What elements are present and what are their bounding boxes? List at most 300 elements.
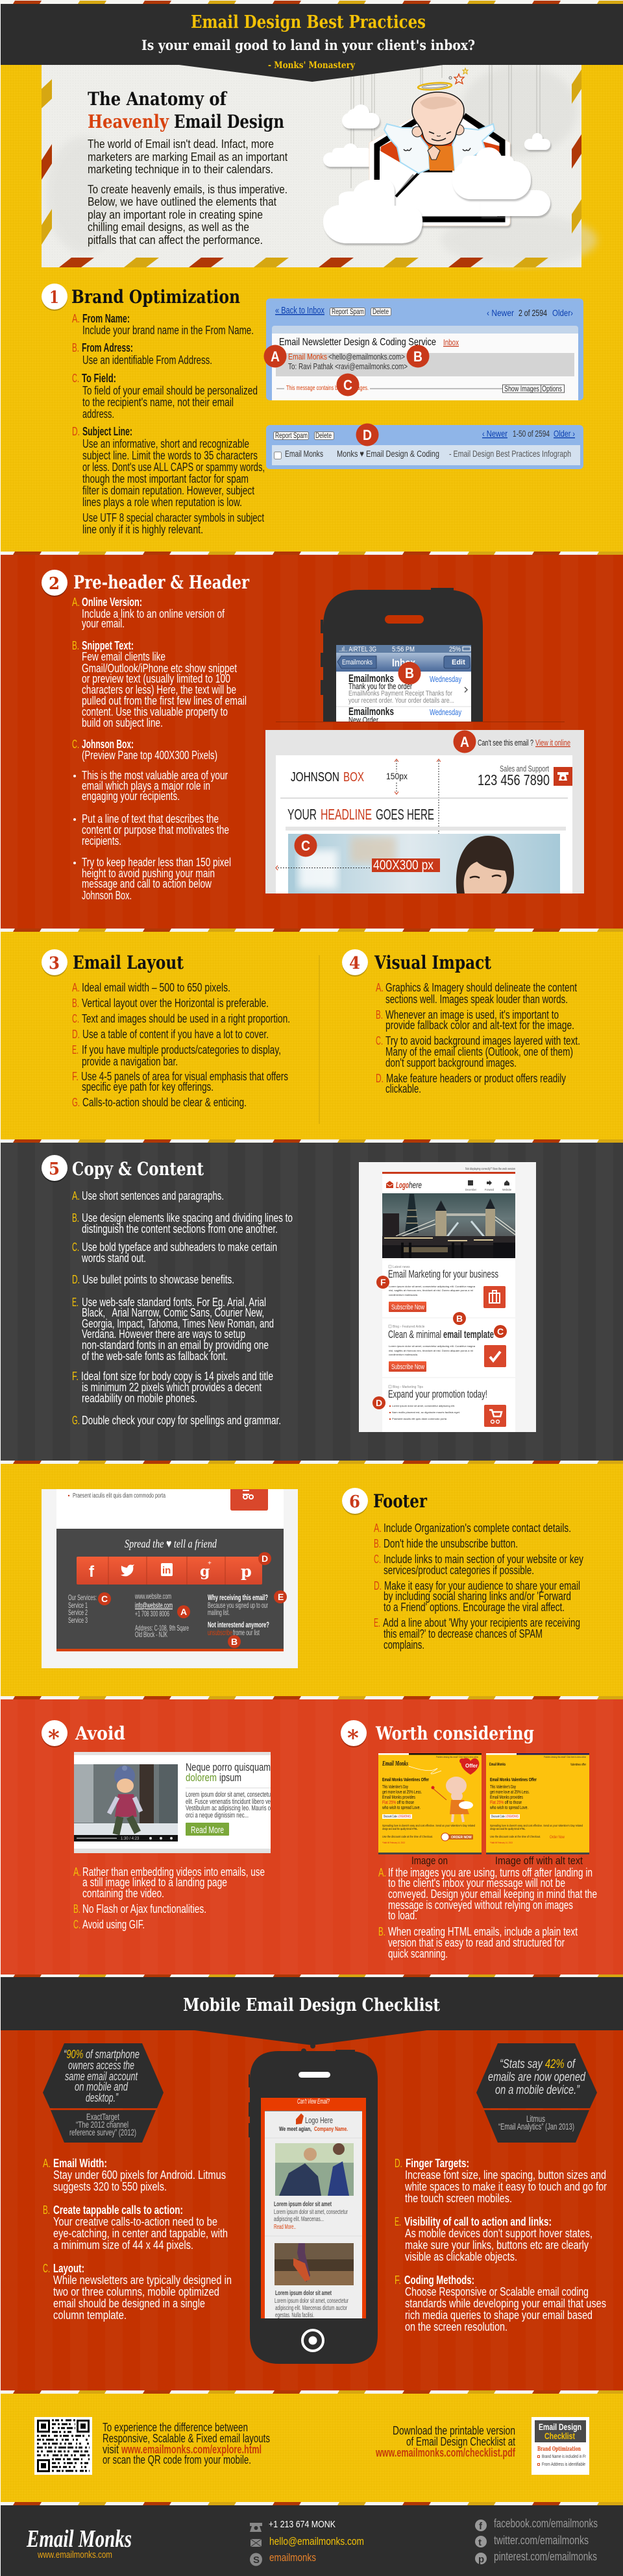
checklist thumbnail [531, 2417, 589, 2475]
gmail message screenshot: Show Images [504, 384, 539, 393]
checklist text: lines plays a role when reputation is low. [82, 496, 242, 509]
responsive text: www.emailmonks.com/explore.html [121, 2443, 262, 2456]
email footer mock: mailing list. [208, 1608, 230, 1617]
marker C on mock [295, 834, 317, 857]
list text: Johnson Box. [82, 889, 132, 902]
list text: B. [376, 1008, 383, 1021]
list text: Few email clients like [82, 650, 165, 663]
responsive text [103, 2421, 270, 2466]
list text: Don't hide the unsubscribe button. [384, 1537, 518, 1550]
johnson box email mock: 123 456 7890 [478, 772, 550, 788]
list text: engaging your recipients. [82, 790, 180, 803]
list text: C. [72, 1012, 79, 1025]
list text: your email. [82, 617, 125, 630]
list text: Whenever an image is used, it's important to [385, 1008, 559, 1021]
left checklist: Layout: [53, 2262, 84, 2275]
number badge 5 [42, 1155, 67, 1182]
marker A [263, 345, 287, 367]
list text: Make feature headers or product offers readily [386, 1072, 566, 1085]
email footer mock: in [162, 1565, 171, 1576]
heading banner [1, 1977, 623, 2045]
marker C: C [343, 377, 352, 393]
list text: G. [72, 1414, 80, 1427]
social: twitter [475, 2534, 589, 2548]
list text: version that is easy to read and structured for [388, 1936, 565, 1949]
quote: 90 percent: reference survey” (2012) [69, 2127, 136, 2137]
newsletter email mock: Forward [485, 1188, 494, 1191]
list text: a still image linked to a landing page [82, 1876, 227, 1889]
left checklist: email should be designed in a single [53, 2297, 205, 2310]
checklist text: From Name: [82, 312, 130, 325]
number badge 1: 1 [49, 288, 59, 308]
email footer mock: +1 708 300 8006 [135, 1609, 169, 1618]
list text: E. [72, 1296, 79, 1309]
marker D [373, 1396, 385, 1409]
envelope body [369, 104, 510, 226]
list text: G. [72, 1096, 80, 1109]
marker C on mock: C [301, 838, 310, 854]
image off email: Problem viewing this email? Click here to view online [544, 1756, 586, 1758]
mobile phone with email: Company Name. [314, 2126, 348, 2132]
left checklist: a minimum size of 44 x 44 pixels. [53, 2239, 193, 2252]
list text: recipients. [82, 834, 121, 847]
image on email: Discount Code LOVEMONKS [384, 1815, 411, 1819]
checklist text: Use an identifiable From Address. [82, 354, 212, 367]
list text: E. [72, 1043, 79, 1056]
marker B: B [413, 348, 422, 365]
list text: B. [72, 997, 79, 1010]
quote: 42 percent: emails are now opened [488, 2071, 586, 2084]
list text: F. [72, 1070, 79, 1083]
newsletter email mock: condimentum malesuada. [389, 1353, 418, 1356]
intro heading: The Anatomy of [88, 88, 228, 110]
list text: complains. [384, 1638, 424, 1651]
mobile phone with email: We meet agian, [279, 2126, 312, 2132]
right checklist: D. [395, 2157, 402, 2170]
intro heading: Heavenly [88, 111, 169, 132]
number badge 2 [42, 570, 67, 597]
quote: 90 percent: on mobile and [75, 2080, 128, 2093]
list text: Use web-safe standard fonts. For Eg. Arial, Arial [82, 1296, 266, 1309]
right checklist: E. [395, 2215, 401, 2228]
photo: tower bridge at night [382, 1193, 515, 1258]
list text: C. [72, 1241, 79, 1254]
phone with inbox preview: ..ıl.. AIRTEL 3G [339, 646, 376, 653]
checklist text: Use an informative, short and recognizable [82, 437, 249, 450]
newsletter email mock: Blog › Marketing Tips [393, 1385, 423, 1389]
list text: Double check your copy for spellings and grammar. [82, 1414, 281, 1427]
400x300 label: 400X300 px [373, 858, 434, 873]
phone with inbox preview: Wednesday [430, 674, 461, 684]
quote: 42 percent: “Email Analytics” (Jan 2013) [498, 2121, 574, 2132]
phone with inbox preview [276, 588, 565, 725]
intro text: play an important role in creating spine [88, 208, 263, 221]
newsletter email mock: nisl, sagittis at rhoncus nec, tincidunt at nisl. Donec aliquam purus a mi [389, 1349, 473, 1352]
list text: Rather than embedding videos into emails, use [82, 1865, 265, 1878]
list text: Put a line of text that describes the [82, 812, 219, 825]
list text: build on subject line. [82, 716, 163, 729]
responsive text: To experience the difference between [103, 2421, 248, 2434]
panel: 5 copy and content [42, 1155, 536, 1432]
checklist text: D. [72, 425, 80, 438]
number badge 6 [342, 1488, 368, 1515]
intro heading [88, 88, 284, 132]
marker C: C [101, 1594, 108, 1604]
number badge 4: 4 [349, 954, 360, 973]
newsletter email mock: nisl, sagittis at rhoncus nec, tincidunt at nisl. Donec aliquam purus a mi [389, 1289, 473, 1292]
asterisk badge [341, 1720, 367, 1751]
list text: Use bullet points to showcase benefits. [82, 1273, 234, 1286]
phone with inbox preview: New Order [348, 715, 378, 725]
logo: Email Monks: www.emailmonks.com [37, 2549, 112, 2560]
video email mock: dolorem [186, 1771, 217, 1784]
image on email [378, 1753, 482, 1854]
right checklist: visible as clickable objects. [405, 2250, 517, 2263]
left checklist: Your creative calls-to-action need to be [53, 2215, 217, 2228]
phone with inbox preview: your recent order. Your order details are... [348, 697, 454, 705]
list text: C. [376, 1034, 383, 1047]
image off email: Order Now [550, 1836, 565, 1840]
email footer mock: + [208, 1560, 212, 1567]
mobile phone with email: Can't View Email? [297, 2098, 330, 2106]
email footer mock: g [200, 1563, 210, 1580]
panel: avoid [42, 1720, 271, 1931]
checklist text: A. [72, 312, 80, 325]
right checklist: Finger Targets: [406, 2157, 469, 2170]
email footer mock: Spread the ♥ tell a friend [125, 1537, 217, 1550]
checklist text: subject line. Limit the words to 35 characters [82, 449, 258, 462]
video email mock: Lorem ipsum dolor sit amet, consectetu [186, 1791, 271, 1799]
video email mock: 1:30 / 4:23 [121, 1837, 140, 1841]
list text: to load. [388, 1909, 417, 1922]
gmail inbox row screenshot: Monks ♥ Email Design & Coding [337, 448, 439, 459]
checklist text: To Field: [82, 372, 116, 385]
list text: Text and images should be used in a right proportion. [82, 1012, 290, 1025]
newsletter email mock: Lorem ipsum dolor sit amet, consectetur adipiscing elit. Curabitur magna [389, 1344, 476, 1348]
checklist text: From Adress: [82, 341, 133, 354]
mobile phone with email: Logo Here [305, 2115, 333, 2125]
image on email: who wish to spread Love. [382, 1806, 421, 1810]
marker A on mock: A [460, 734, 469, 750]
johnson box email mock: Sales and Support [500, 764, 549, 773]
asterisk badge: * [48, 1725, 60, 1751]
gmail inbox row screenshot: Delete [315, 431, 332, 440]
heading: Footer [373, 1490, 428, 1512]
phone with inbox preview: Inbox [392, 657, 415, 669]
marker C: C [497, 1326, 504, 1337]
clouds right [480, 190, 550, 216]
video email mock [74, 1752, 271, 1853]
list text: Use short sentences and paragraphs. [82, 1189, 224, 1202]
list text: A. [374, 1522, 382, 1535]
illustration: angel monk in envelope with clouds [323, 65, 550, 243]
list text: readability on mobile phones. [82, 1392, 197, 1405]
image on email: This Valentine's Day [382, 1785, 408, 1790]
email footer mock: p [241, 1562, 252, 1581]
panel: 4 visual impact [342, 949, 580, 1095]
newsletter email mock [359, 1162, 536, 1432]
list text: Black, Arial Narrow, Comic Sans, Courier New, [82, 1306, 264, 1319]
list text: to the client's inbox your message will not be [388, 1877, 565, 1889]
heading: Visual Impact [374, 952, 491, 973]
email footer mock: unsubscribe [208, 1628, 232, 1637]
checklist text: To field of your email should be personalized [82, 384, 258, 397]
image on email: Email Monks [382, 1760, 408, 1768]
marker D: D [262, 1553, 268, 1564]
list text: C. [73, 1918, 80, 1931]
list text: content or purpose that motivates the [82, 823, 229, 836]
marker B [453, 1312, 466, 1325]
heading: Email Layout [73, 952, 184, 973]
marker A [177, 1605, 190, 1618]
number badge 6: 6 [349, 1492, 360, 1512]
johnson box email mock: View it online [535, 738, 570, 747]
cloud small left [323, 143, 382, 167]
number badge 5: 5 [49, 1160, 60, 1179]
image on email: Email Monks Valentines Offer [382, 1778, 429, 1782]
list text: Ideal font size for body copy is 14 pixels and title [81, 1370, 273, 1383]
mobile phone with email: Lorem ipsum dolor sit amet, consectetur [274, 2209, 348, 2216]
list text: Verdana. However there are ways to setup [82, 1328, 245, 1341]
list text: words stand out. [81, 1252, 146, 1265]
list text: Johnson Box: [82, 738, 134, 751]
responsive text: Responsive, Scalable & Fixed email layouts [103, 2432, 270, 2445]
list text: sections well. Images speak louder than words. [385, 993, 568, 1006]
intro text: marketing technique in to their calendars. [88, 163, 273, 176]
phone with inbox preview: EmailMonks Payment Receipt Thanks for [348, 690, 452, 698]
mobile phone with email: adipiscing elit. Maecenas dictum auctor [275, 2305, 347, 2312]
image off email: Valentines offer [570, 1763, 586, 1767]
checklist text: Subject Line: [82, 425, 132, 438]
gmail message screenshot: Delete [373, 307, 389, 316]
list text: clickable. [385, 1082, 421, 1095]
list text: D. [72, 1273, 80, 1286]
email footer mock: Address: C-108, 9th Sqare [135, 1623, 189, 1633]
left checklist: suggests 320 to 550 pixels. [53, 2180, 167, 2193]
mobile phone with email: Lorem ipsum dolor sit amet [274, 2201, 332, 2208]
panel: 2 pre-header and header [42, 570, 584, 902]
video email mock: Vestibulum ac adipiscing leo. Mauris o [186, 1804, 271, 1812]
list text: content. Use this valuable property to [82, 705, 228, 718]
phone with inbox preview: Wednesday [430, 707, 461, 717]
panel: envelope intro [42, 65, 597, 267]
list text: Include a link to an online version of [82, 607, 225, 620]
gmail message screenshot [266, 298, 583, 400]
checklist thumbnail: Email Design [539, 2422, 581, 2432]
image on email: Use the discount code at the time of Checkout. [382, 1835, 433, 1838]
gmail inbox row screenshot: ‹ Newer [482, 428, 507, 439]
newsletter email mock: Subscribe Now [391, 1304, 424, 1311]
list text: D. [376, 1072, 384, 1085]
image on email: *Valid till February 14, 2013 [382, 1841, 406, 1844]
list text: Use a table of content if you have a lot to cover. [82, 1028, 269, 1041]
email footer mock: info@website.com [135, 1601, 173, 1610]
number badge 1 [42, 284, 67, 311]
right checklist: Visibility of call to action and links: [404, 2215, 552, 2228]
list text: Use design elements like spacing and dividing lines to [82, 1211, 293, 1224]
download text: www.emailmonks.com/checklist.pdf [375, 2446, 516, 2459]
gmail inbox row screenshot: 1-50 of 2594 [513, 428, 550, 439]
email footer mock: Service 1 [68, 1601, 88, 1610]
image off email: Discount Code LOVEMONKS [491, 1815, 519, 1819]
newsletter email mock: condimentum malesuada. [389, 1293, 418, 1296]
image off email: who wish to spread Love. [489, 1806, 528, 1810]
quote: 42 percent: on a mobile device.” [495, 2084, 580, 2097]
marker D: D [376, 1398, 382, 1408]
email footer mock: Old Block - NJK [135, 1630, 167, 1639]
newsletter email mock: Blog › Featured Article [393, 1325, 425, 1329]
email footer mock: www.website.com [134, 1592, 171, 1601]
contact: phone: +1 213 674 MONK [269, 2519, 336, 2530]
list text [72, 596, 247, 902]
intro text: Below, we have outlined the elements that [88, 195, 276, 208]
list text: provide a navigation bar. [82, 1055, 178, 1068]
panel: 3 email layout [42, 949, 290, 1109]
gmail message screenshot: To: Ravi Pathak <ravi@emailmonks.com> [288, 361, 408, 371]
email footer mock: Not interestend anymore? [208, 1620, 269, 1629]
johnson box email mock: BOX [343, 770, 364, 784]
heading: Worth considering [375, 1723, 534, 1744]
image off email: Use the discount code at the time of Checkout. [490, 1835, 541, 1838]
list text: height to avoid pushing your main [82, 867, 215, 880]
list text [73, 1865, 265, 1931]
phone with inbox preview: 5:56 PM [392, 646, 415, 653]
gmail message screenshot: <hello@emailmonks.com> [328, 352, 405, 361]
list text: D. [72, 1028, 80, 1041]
list text: E. [374, 1616, 380, 1629]
marker B: B [231, 1636, 238, 1647]
gmail message screenshot: ‹ Newer [487, 308, 514, 318]
list text: A. [73, 1865, 81, 1878]
download text: Download the printable version [393, 2424, 515, 2437]
newsletter email mock: Logo [396, 1180, 409, 1190]
newsletter email mock: Praesent iaculis elit quis diam commodo porta [392, 1417, 447, 1420]
image off email: design and avail the quality Email HTML. [490, 1827, 526, 1830]
image on email: get more love at 25% Less. [382, 1790, 422, 1795]
newsletter email mock: here [409, 1180, 422, 1190]
image off email: Spreading love is doesn't easy and cost effective. Send us your Valentine's Day related [490, 1824, 583, 1827]
list text: don't support background images. [385, 1056, 517, 1069]
left checklist: Create tappable calls to action: [53, 2204, 183, 2217]
list text: services/product categories if possible. [384, 1564, 534, 1577]
gmail message screenshot: Options [542, 384, 562, 393]
heading: Pre-header & Header [73, 572, 250, 593]
left checklist: A. [43, 2157, 51, 2170]
email footer mock: Service 2 [68, 1608, 88, 1617]
gmail message screenshot: Older› [552, 308, 573, 318]
gmail message screenshot: « Back to Inbox [275, 305, 324, 316]
quote: 90 percent: “The 2012 channel [76, 2119, 128, 2130]
checklist text: Use UTF 8 special character symbols in subject [82, 511, 264, 524]
quote: 90 percent: same email account [65, 2070, 138, 2083]
email footer mock: frome our list [233, 1628, 260, 1637]
newsletter email mock: Latest news [393, 1265, 410, 1269]
email footer mock: Our Services: [68, 1593, 97, 1602]
image off email: Flat 25% off to those [490, 1801, 522, 1805]
left checklist: B. [43, 2204, 50, 2217]
video email mock: orci a neque dignissim nec... [186, 1812, 249, 1819]
logo: Email Monks: Email Monks [26, 2525, 132, 2553]
newsletter email mock: December [465, 1188, 476, 1191]
mobile phone with email: Lorem ipsum dolor sit amet, consectetur [275, 2298, 348, 2305]
image off email: Email Monks [489, 1763, 506, 1767]
quote: 42 percent: “Stats say 42% of [500, 2058, 576, 2071]
left checklist: column template. [53, 2309, 127, 2322]
checklist text: line only if it is highly relevant. [82, 523, 203, 536]
left checklist: C. [43, 2262, 50, 2275]
gmail message screenshot: Email Newsletter Design & Coding Service [279, 337, 436, 348]
checklist text: or less. Dont's use ALL CAPS or spammy words, [82, 461, 265, 474]
image on email: Spreading love is doesn't easy and cost effective. Send us your Valentine's Day related [382, 1824, 475, 1827]
list text: containing the video. [82, 1887, 164, 1900]
checklist text: Include your brand name in the From Name. [82, 324, 254, 337]
intro text [88, 138, 287, 247]
list text: to a Friend' options. Encourage the viral affect. [384, 1601, 565, 1614]
list text [374, 1522, 583, 1651]
newsletter email mock: Subscribe Now [391, 1363, 424, 1371]
quote: 90 percent: desktop.” [86, 2091, 119, 2104]
marker D [258, 1552, 271, 1565]
checklist thumbnail: Checklist [544, 2431, 575, 2441]
icon: QR code [34, 2417, 92, 2475]
list text: this email?' to decrease chances of SPAM [384, 1627, 543, 1640]
list text: A. [378, 1866, 386, 1879]
marker B on phone [398, 662, 421, 685]
byline: - Monks' Monastery [268, 60, 356, 71]
intro text: marketers are marking Email as an important [88, 151, 287, 164]
list text: A. [72, 981, 80, 994]
marker C [336, 374, 360, 396]
checklist thumbnail: From Address is identifiable [542, 2462, 585, 2467]
footer bar [26, 2517, 598, 2566]
marker C [98, 1592, 111, 1605]
marker A on mock [453, 731, 476, 753]
image off email: *Valid till February 14, 2013 [490, 1841, 513, 1844]
checklist text: B. [72, 341, 79, 354]
email footer mock: Because you signed up to our [208, 1601, 268, 1610]
marker B [228, 1635, 241, 1648]
gmail inbox row screenshot: Email Monks [285, 448, 323, 459]
number badge 3 [42, 949, 67, 977]
phone with inbox preview: Emailmonks [342, 659, 373, 666]
list text: C. [374, 1553, 381, 1566]
video email mock: ipsum [219, 1771, 241, 1784]
list text: Try to keep header less than 150 pixel [82, 856, 231, 869]
right checklist: Coding Methods: [404, 2274, 474, 2287]
list text [378, 1866, 597, 1960]
list text: is minimum 22 pixels which provides a decent [82, 1381, 262, 1394]
right checklist: the touch screen mobiles. [405, 2192, 512, 2205]
list text: Georgia, Impact, Tahoma, Times New Roman, and [82, 1317, 274, 1330]
marker B: B [456, 1313, 463, 1324]
newsletter email mock: email template [443, 1328, 494, 1341]
checklist text: C. [72, 372, 79, 385]
list text: Ideal email width – 500 to 650 pixels. [82, 981, 230, 994]
marker D [356, 423, 379, 446]
list text: B. [72, 639, 79, 652]
phone with inbox preview: Thank you for the order [348, 681, 412, 691]
newsletter email mock: Clean & minimal [388, 1328, 441, 1341]
quote: 90 percent [43, 2043, 164, 2143]
contact: skype [250, 2551, 316, 2566]
social: facebook: f [479, 2521, 483, 2532]
contact: skype: emailmonks [269, 2551, 316, 2564]
list text: characters or less) Here, the text will be [82, 683, 236, 696]
list text: If you have multiple products/categories to display, [82, 1043, 281, 1056]
gmail inbox row screenshot: Older › [554, 428, 575, 439]
image off email: Email Monks Valentines Offer [490, 1778, 537, 1782]
heading: Avoid [75, 1723, 125, 1744]
